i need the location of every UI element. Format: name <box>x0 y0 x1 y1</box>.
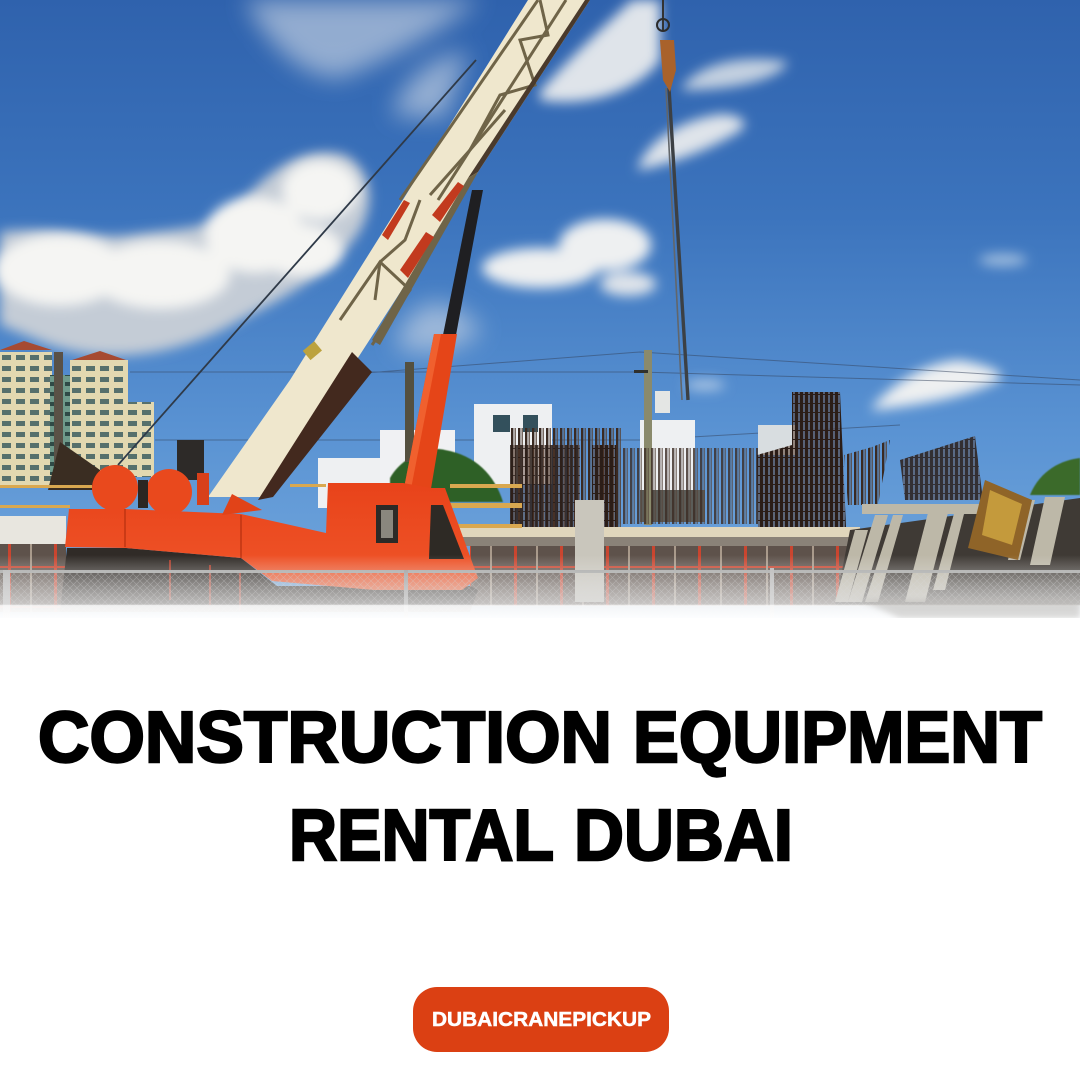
large cloud at left <box>0 152 369 355</box>
chain link fence <box>0 568 1080 605</box>
crane boom <box>208 0 590 500</box>
title line 2: RENTAL <box>289 796 554 876</box>
grey haze at right bottom <box>860 600 1080 618</box>
hanging hoist cable and hook <box>657 0 688 400</box>
mid-ground white buildings <box>318 404 796 522</box>
button: brand name: DUBAICRANEPICKUP <box>432 1009 651 1031</box>
title line 1: EQUIPMENT <box>633 698 1042 778</box>
boom lattice <box>340 0 566 345</box>
title <box>38 698 1042 876</box>
stacked concrete forms <box>835 480 1080 606</box>
left apartment towers <box>0 341 154 490</box>
main body <box>65 483 478 590</box>
title line 1: CONSTRUCTION <box>38 698 612 778</box>
boom support cable <box>118 60 476 465</box>
tree <box>390 449 1080 502</box>
sky background <box>0 0 1080 618</box>
red scaffold glimpses under body <box>170 560 240 610</box>
smaller clouds <box>245 0 482 353</box>
hydraulic cylinder <box>404 190 483 488</box>
button: brand name <box>413 987 669 1052</box>
title line 2: DUBAI <box>574 796 793 876</box>
power lines <box>130 352 1080 440</box>
rebar columns <box>510 392 983 528</box>
crane orange carrier body <box>60 465 478 612</box>
cable drums <box>92 465 138 511</box>
photo: crane at construction site <box>0 0 1080 618</box>
utility poles <box>177 350 670 525</box>
white fade at bottom of photo <box>0 555 1080 618</box>
clouds <box>0 0 1027 410</box>
undercarriage shadow <box>61 548 478 606</box>
operator cab window <box>429 505 464 559</box>
concrete deck and scaffolding <box>0 484 870 612</box>
